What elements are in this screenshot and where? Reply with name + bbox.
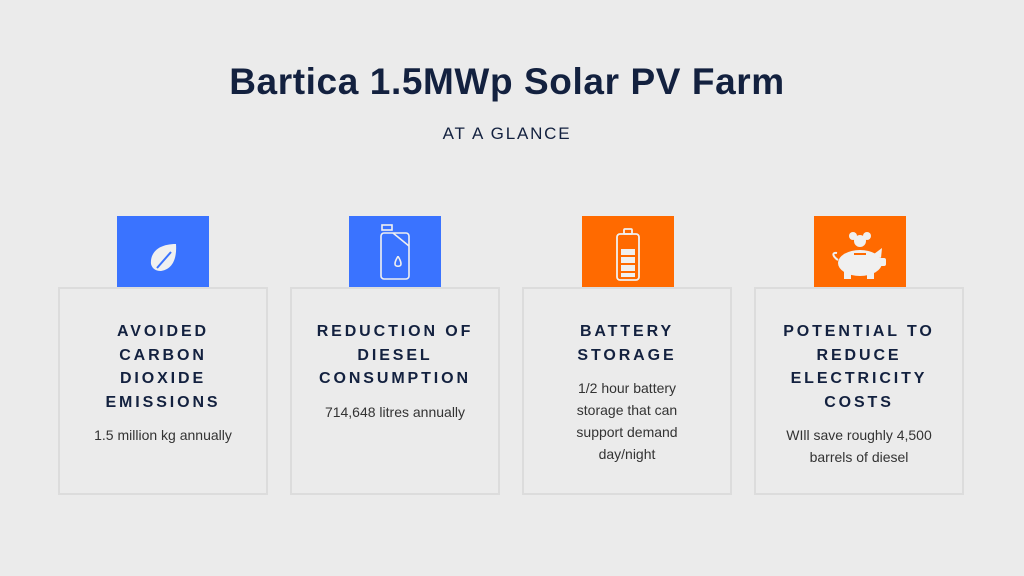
- panel: battery: day/night: [599, 446, 655, 462]
- title: Bartica 1.5MWp Solar PV Farm: [229, 61, 785, 102]
- panel: battery: BATTERY: [580, 323, 674, 340]
- panel: carbon: 1.5 million kg annually: [94, 427, 232, 443]
- panel: costs: WIll save roughly 4,500: [786, 427, 932, 443]
- panel: battery: [522, 287, 732, 495]
- panel: costs: [754, 287, 964, 495]
- panel: battery: 1/2 hour battery: [578, 380, 676, 396]
- panel: diesel: DIESEL: [357, 346, 433, 364]
- subtitle: AT A GLANCE: [443, 124, 571, 143]
- panel: diesel: CONSUMPTION: [319, 370, 471, 387]
- panel: costs: ELECTRICITY: [791, 370, 927, 387]
- panel: carbon: [58, 287, 268, 495]
- panel: diesel: REDUCTION OF: [317, 323, 473, 340]
- icon: battery: [582, 216, 674, 287]
- panel: carbon: AVOIDED: [117, 323, 209, 340]
- panel: diesel: 714,648 litres annually: [325, 404, 465, 420]
- panel: diesel: [290, 287, 500, 495]
- panel: carbon: CARBON: [119, 346, 207, 364]
- panel: costs: COSTS: [824, 394, 894, 410]
- panel: carbon: EMISSIONS: [105, 394, 220, 410]
- icon: leaf: [117, 216, 209, 287]
- panel: battery: storage that can: [577, 402, 677, 418]
- panel: costs: barrels of diesel: [810, 449, 908, 465]
- panel: costs: POTENTIAL TO: [783, 323, 935, 340]
- panel: battery: STORAGE: [577, 346, 677, 364]
- icon: piggy bank: [814, 216, 906, 287]
- icon: jerrycan: [349, 216, 441, 287]
- panel: carbon: DIOXIDE: [120, 370, 206, 387]
- panel: battery: support demand: [576, 424, 678, 440]
- panel: costs: REDUCE: [817, 346, 901, 364]
